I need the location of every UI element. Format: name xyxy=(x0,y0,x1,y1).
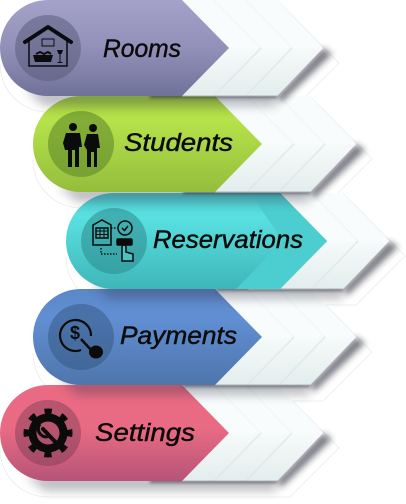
row 2: Students xyxy=(33,96,365,202)
reservations back chevrons xyxy=(91,193,398,299)
reservations arrow body xyxy=(66,193,327,289)
row 5: Settings xyxy=(0,385,332,491)
icon: dollar coin and hand: $ xyxy=(70,323,80,343)
rooms back chevrons xyxy=(25,0,332,106)
label: Payments: Payments xyxy=(120,322,237,350)
row 4: Payments xyxy=(33,289,365,395)
reservations icon badge xyxy=(81,208,147,274)
settings icon badge xyxy=(15,400,81,466)
settings back chevrons xyxy=(25,385,332,491)
reservations tip band xyxy=(236,193,327,289)
students back chevrons xyxy=(58,96,365,202)
row 3: Reservations xyxy=(66,193,398,299)
label: Settings: Settings xyxy=(95,419,195,447)
students arrow body xyxy=(33,96,262,192)
label: Students: Students xyxy=(124,129,233,157)
row 1: Rooms xyxy=(0,0,332,106)
label: Rooms: Rooms xyxy=(103,35,181,63)
payments arrow body xyxy=(33,289,262,385)
label: Reservations: Reservations xyxy=(153,226,303,254)
payments back chevrons xyxy=(58,289,365,395)
settings arrow body xyxy=(0,385,229,481)
students icon badge xyxy=(48,111,114,177)
icon: house with sofa and lamp xyxy=(25,27,71,66)
rooms icon badge xyxy=(15,15,81,81)
rooms arrow body xyxy=(0,0,229,96)
icon: hotel booking tap xyxy=(93,220,133,261)
icon: two students xyxy=(63,123,100,167)
icon: gear and wrench xyxy=(27,412,69,454)
payments icon badge xyxy=(48,304,114,370)
icon: dollar coin and hand xyxy=(60,320,103,358)
